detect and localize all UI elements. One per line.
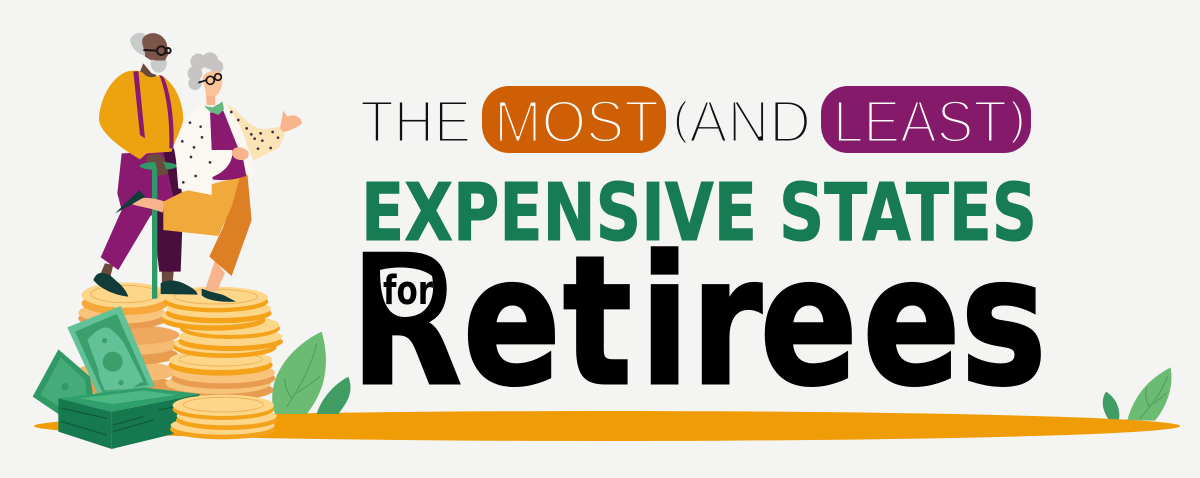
illustration: elderly couple [93, 33, 302, 302]
woman [115, 52, 302, 302]
icon: right leaves [1103, 367, 1171, 421]
text: the: THE [360, 89, 471, 155]
text: for: for [383, 268, 433, 314]
pill: most [482, 86, 666, 153]
text: and: AND [689, 89, 811, 155]
icon: stack of cash [58, 387, 200, 449]
pill: least [821, 86, 1031, 153]
cane [140, 160, 177, 299]
icon: loose banknotes [33, 306, 155, 414]
title line: The Most (and Least) [360, 86, 1031, 155]
counter of the R [380, 268, 433, 317]
heading: retirees: Retirees [351, 219, 1046, 426]
heading: expensive states: STATES [779, 167, 1037, 259]
illustration: coins, cash and leaves [33, 282, 350, 449]
icon: left leaves [272, 332, 350, 414]
heading: expensive states: EXPENSIVE [361, 167, 757, 259]
text: least: LEAST [833, 89, 1007, 155]
text: opening parenthesis: ( [673, 92, 689, 144]
back coin stack [77, 282, 179, 396]
front low coins [170, 395, 277, 439]
text: closing parenthesis: ) [1010, 92, 1025, 144]
ground: orange ellipse [34, 411, 1180, 441]
text: most: MOST [494, 89, 659, 155]
man [93, 33, 198, 297]
front coin stack [161, 287, 283, 401]
